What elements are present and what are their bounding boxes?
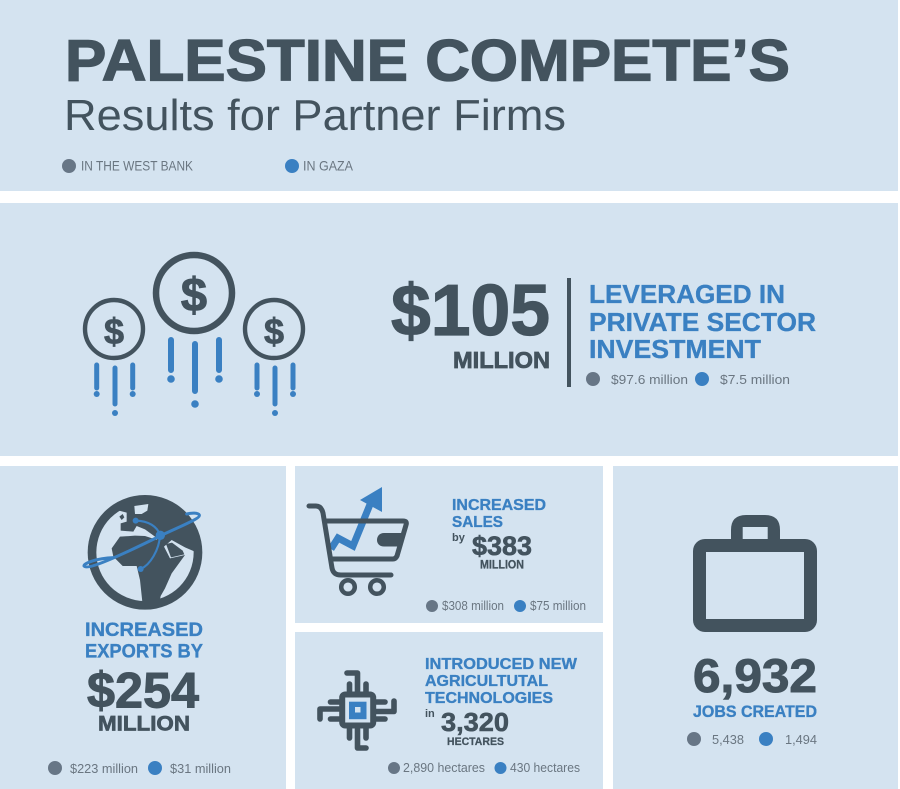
panel: jobs <box>613 466 898 789</box>
breakdown: $308 million <box>442 599 504 613</box>
panel: private sector investment <box>0 203 898 456</box>
breakdown <box>687 732 817 747</box>
heading: increased sales: INCREASED <box>452 497 546 514</box>
icon: falling coins: $ <box>181 268 207 321</box>
breakdown: 2,890 hectares <box>403 760 485 775</box>
legend: IN THE WEST BANK <box>81 158 194 174</box>
heading: leveraged in private sector investment: PRIVATE SECTOR <box>589 307 816 337</box>
big number: $105 million: MILLION <box>453 347 550 373</box>
heading: introduced new agricultural technologies: INTRODUCED NEW <box>425 656 578 673</box>
breakdown: $31 million <box>170 761 231 776</box>
big number: 3,320 hectares: 3,320 <box>441 707 509 737</box>
breakdown: 1,494 <box>785 732 817 747</box>
breakdown: $97.6 million <box>611 372 688 387</box>
heading: leveraged in private sector investment: LEVERAGED IN <box>589 279 785 309</box>
heading: introduced new agricultural technologies: TECHNOLOGIES <box>425 690 553 707</box>
icon: globe <box>84 495 202 610</box>
big number: 3,320 hectares: HECTARES <box>447 736 504 748</box>
breakdown: $223 million <box>70 761 138 776</box>
title: PALESTINE COMPETE’S <box>65 28 790 94</box>
breakdown <box>48 761 231 776</box>
heading: leveraged in private sector investment: INVESTMENT <box>589 334 761 364</box>
big number: $105 million: $105 <box>391 271 550 351</box>
icon: falling coins <box>85 255 303 416</box>
breakdown: $75 million <box>530 599 586 613</box>
big number: $383 million: MILLION <box>480 560 524 572</box>
heading: increased exports: INCREASED <box>85 619 203 641</box>
heading: increased sales <box>452 497 546 531</box>
big number: $383 million: by <box>452 532 466 544</box>
big number: 6,932: 6,932 <box>693 650 817 703</box>
panel: sales <box>295 466 603 623</box>
breakdown <box>426 599 586 613</box>
icon: falling coins: $ <box>264 311 284 352</box>
panel: exports <box>0 466 286 789</box>
subtitle: Results for Partner Firms <box>64 91 566 140</box>
big number: $383 million <box>452 531 532 572</box>
icon: chip <box>320 673 394 748</box>
big number: $254 million: $254 <box>87 662 199 718</box>
big number: $383 million: $383 <box>472 531 532 561</box>
heading: leveraged in private sector investment <box>589 279 816 364</box>
icon: shopping cart <box>309 487 406 594</box>
heading: increased sales: SALES <box>452 514 503 531</box>
legend <box>62 158 354 174</box>
heading: introduced new agricultural technologies <box>425 656 578 707</box>
panel: header <box>0 0 898 191</box>
breakdown: $7.5 million <box>720 372 790 387</box>
legend: IN GAZA <box>303 158 354 174</box>
heading: increased exports: EXPORTS BY <box>85 640 203 662</box>
breakdown: 5,438 <box>712 732 744 747</box>
panel: agricultural technologies <box>295 632 603 789</box>
icon: briefcase <box>693 515 817 632</box>
breakdown <box>388 760 580 775</box>
big number: 3,320 hectares <box>425 707 509 748</box>
label: jobs created: JOBS CREATED <box>693 703 817 721</box>
breakdown: 430 hectares <box>510 760 580 775</box>
heading: introduced new agricultural technologies: AGRICULTUTAL <box>425 673 548 690</box>
big number: $254 million: MILLION <box>98 712 190 736</box>
heading: increased exports <box>85 619 203 662</box>
big number: 3,320 hectares: in <box>425 708 435 720</box>
icon: falling coins: $ <box>104 311 124 352</box>
breakdown <box>586 372 790 387</box>
